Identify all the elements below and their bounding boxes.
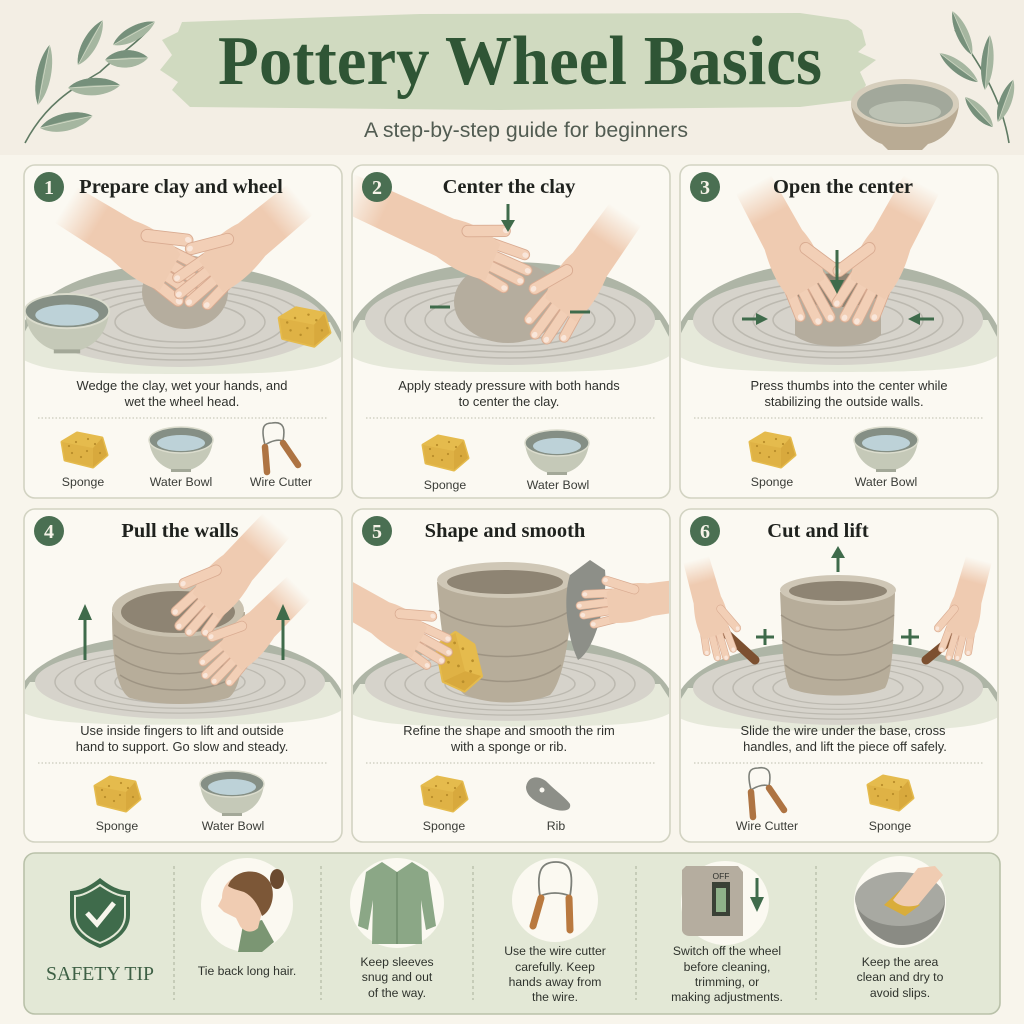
tip: wire cutter: hands away from: [509, 975, 601, 989]
step 5 heading: Shape and smooth: [425, 520, 586, 542]
tip: switch off: trimming, or: [695, 975, 759, 989]
tip: clean area: [854, 856, 946, 1000]
step 4 heading: Pull the walls: [121, 520, 239, 542]
step 1 illustration: [25, 188, 341, 374]
tip: wire cutter: the wire.: [532, 990, 578, 1004]
step 6 badge: [690, 516, 720, 546]
step 3 description: Press thumbs into the center while: [750, 378, 948, 393]
tool: sponge: [868, 776, 913, 833]
tip: sleeves: of the way.: [368, 986, 426, 1000]
step 2 description: [398, 378, 620, 409]
tip: tie back hair: Tie back long hair.: [198, 964, 296, 978]
step 5 illustration: [353, 560, 669, 726]
tool: sponge: Sponge: [869, 819, 911, 833]
step 5 badge: 5: [372, 521, 382, 543]
tool: sponge: [422, 777, 467, 833]
panel: step 1: [14, 165, 346, 498]
step 5 description: with a sponge or rib.: [450, 739, 567, 754]
step 2 badge: [362, 172, 392, 202]
step 2 description: to center the clay.: [459, 394, 559, 409]
tool: water bowl: Water Bowl: [527, 478, 589, 492]
step 5 description: [403, 723, 615, 754]
tool: sponge: Sponge: [424, 478, 466, 492]
panel: step 4: [14, 503, 346, 842]
step 4 description: [76, 723, 288, 754]
safety tip label: SAFETY TIP: [46, 963, 154, 985]
title: Pottery Wheel Basics: [218, 23, 822, 100]
step 3 description: [750, 378, 948, 409]
icon: ceramic bowl: [851, 79, 959, 150]
tip: sleeves: snug and out: [362, 970, 433, 984]
step 2 illustration: [353, 176, 669, 372]
tool: water bowl: Water Bowl: [202, 819, 264, 833]
panel: step 3: [672, 165, 1004, 498]
step 6 badge: 6: [700, 521, 710, 543]
header band: [0, 0, 1024, 155]
step 5 description: Refine the shape and smooth the rim: [403, 723, 615, 738]
step 4 description: Use inside fingers to lift and outside: [80, 723, 284, 738]
tool: wire cutter: [250, 423, 312, 489]
tool: sponge: [62, 433, 107, 489]
step 4 badge: 4: [44, 521, 54, 543]
step 1 badge: 1: [44, 177, 54, 199]
tool: water bowl: Water Bowl: [855, 475, 917, 489]
step 6 description: Slide the wire under the base, cross: [741, 723, 945, 738]
left leaf sprig: [25, 16, 158, 143]
tip: switch off: OFF: [712, 871, 730, 881]
step 4 illustration: [25, 516, 341, 724]
step 6 description: handles, and lift the piece off safely.: [743, 739, 947, 754]
step 3 description: stabilizing the outside walls.: [764, 394, 924, 409]
tool: sponge: Sponge: [423, 819, 465, 833]
panel: step 6: [672, 509, 1004, 842]
step 3 badge: 3: [700, 177, 710, 199]
step 3 heading: Open the center: [773, 176, 913, 198]
tip: switch off: before cleaning,: [684, 960, 770, 974]
tool: sponge: Sponge: [62, 475, 104, 489]
step 6 illustration: [672, 546, 1004, 731]
tip: wire cutter: carefully. Keep: [515, 960, 595, 974]
title brush swatch: [160, 13, 876, 110]
step 3 illustration: [681, 179, 997, 372]
step 6 heading: Cut and lift: [767, 520, 869, 542]
step 1 badge: [34, 172, 64, 202]
icon: shield with check: [70, 878, 130, 948]
tool: sponge: [423, 436, 468, 492]
step 2 badge: 2: [372, 177, 382, 199]
tip: tie back hair: [198, 858, 296, 978]
tip: wire cutter: Use the wire cutter: [504, 944, 606, 958]
tool: sponge: Sponge: [751, 475, 793, 489]
tool: water bowl: [200, 771, 264, 833]
tool: sponge: [750, 433, 795, 489]
step 1 description: [77, 378, 287, 409]
tip: sleeves: [350, 858, 444, 1000]
tool: rib: Rib: [547, 819, 565, 833]
tool: water bowl: [525, 430, 589, 492]
step 5 badge: [362, 516, 392, 546]
tool: water bowl: [149, 427, 213, 489]
step 2 heading: Center the clay: [443, 176, 576, 198]
tool: sponge: [95, 777, 140, 833]
tip: switch off: [671, 861, 783, 1004]
tip: clean area: clean and dry to: [857, 970, 944, 984]
step 1 description: wet the wheel head.: [124, 394, 239, 409]
tip: switch off: Switch off the wheel: [673, 944, 781, 958]
tool: wire cutter: [736, 768, 798, 833]
step 1 heading: Prepare clay and wheel: [79, 176, 283, 198]
panel: step 5: [351, 508, 671, 843]
step 2 description: Apply steady pressure with both hands: [398, 378, 620, 393]
tool: sponge: Sponge: [96, 819, 138, 833]
step 3 badge: [690, 172, 720, 202]
step 6 description: [741, 723, 947, 754]
step 1 description: Wedge the clay, wet your hands, and: [77, 378, 287, 393]
tip: clean area: Keep the area: [862, 955, 939, 969]
tool: water bowl: [854, 427, 918, 489]
right leaf sprig: [936, 9, 1019, 143]
tool: wire cutter: Wire Cutter: [736, 819, 798, 833]
tool: water bowl: Water Bowl: [150, 475, 212, 489]
tip: wire cutter: [504, 858, 606, 1004]
subtitle: A step-by-step guide for beginners: [364, 119, 688, 142]
panel: safety tips: [24, 853, 1000, 1014]
tool: wire cutter: Wire Cutter: [250, 475, 312, 489]
tip: sleeves: Keep sleeves: [360, 955, 434, 969]
tool: rib: [526, 777, 570, 833]
panel: step 2: [335, 160, 676, 498]
tip: clean area: avoid slips.: [870, 986, 930, 1000]
step 4 badge: [34, 516, 64, 546]
step 4 description: hand to support. Go slow and steady.: [76, 739, 288, 754]
tip: switch off: making adjustments.: [671, 990, 783, 1004]
